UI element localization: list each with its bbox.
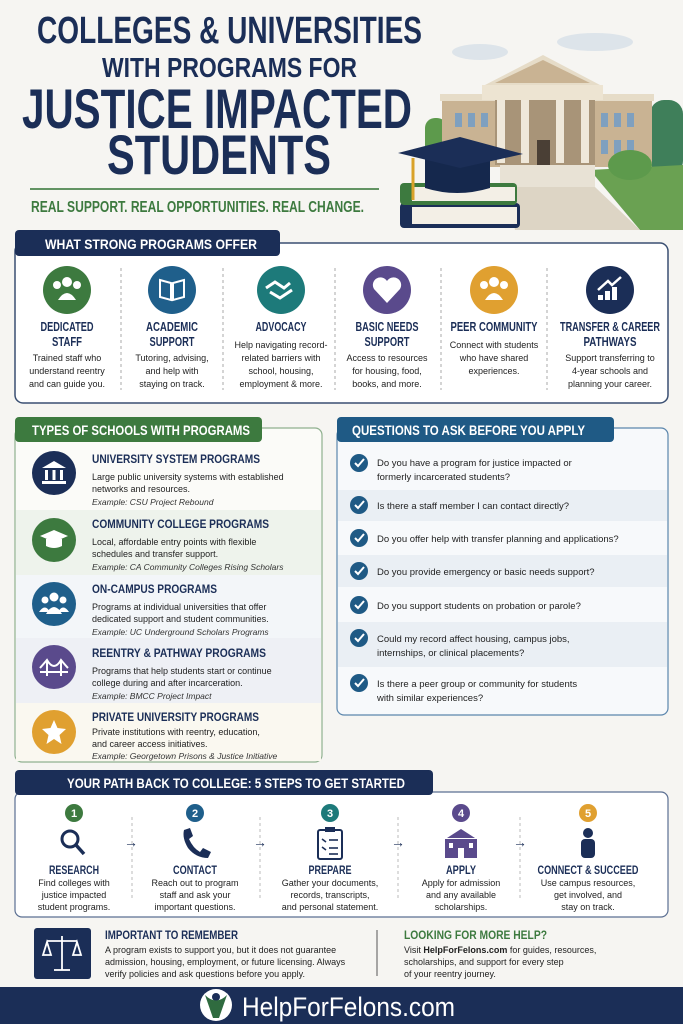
row: on-campus: dedicated support and student communities. [92,614,269,624]
step 1 research: 1 [71,808,77,820]
item: peer community: Connect with students [450,340,539,350]
row: reentry & pathway: Programs that help students start or continue [92,666,272,676]
item: dedicated staff: STAFF [52,334,82,349]
item: transfer & career pathways: planning your career. [568,379,652,389]
item: advocacy [234,266,328,389]
heading: what strong programs offer [15,230,280,256]
item: academic support [135,266,209,389]
item: peer community: who have shared [459,353,528,363]
step 4 apply: Apply for admission [422,878,500,888]
item: basic needs support: Access to resources [346,353,428,363]
note: looking for more help: scholarships, and support for every step [404,957,564,967]
question list: Do you support students on probation or parole? [377,601,581,612]
item: basic needs support [346,266,428,389]
item: transfer & career pathways: Support transferring to [565,353,655,363]
row: reentry & pathway: REENTRY & PATHWAY PROGRAMS [92,646,266,660]
step 4 apply: and any available [426,890,496,900]
note: looking for more help: LOOKING FOR MORE HELP? [404,928,547,942]
step 4 apply [422,804,500,912]
question list: formerly incarcerated students? [377,472,510,483]
row: community college [32,517,284,572]
step 3 prepare: and personal statement. [282,902,378,912]
note: important to remember: IMPORTANT TO REMEMBER [105,928,238,942]
item: basic needs support: for housing, food, [352,366,422,376]
step 5 connect: stay on track. [561,902,615,912]
row: community college: schedules and transfer support. [92,549,218,559]
row: university system: Large public university systems with established [92,472,284,482]
row: private university: and career access initiatives. [92,739,208,749]
footer: HelpForFelons.com [242,992,455,1022]
row: private university [32,710,277,761]
item: transfer & career pathways: 4-year schools and [572,366,648,376]
title: STUDENTS [107,123,331,186]
step 5 connect: Use campus resources, [541,878,635,888]
item: advocacy: Help navigating record- [234,340,328,350]
heading: 5 steps: YOUR PATH BACK TO COLLEGE: 5 STEPS TO GET STARTED [67,775,405,791]
panel: types of schools [15,417,322,762]
arrows: → [253,834,267,850]
row: on-campus [32,582,269,637]
step 5 connect: CONNECT & SUCCEED [538,863,639,877]
title [22,10,422,186]
item: dedicated staff [29,266,105,389]
note: important to remember: verify policies and ask questions before you apply. [105,969,305,979]
step 4 apply: APPLY [446,863,476,877]
item: transfer & career pathways [560,266,660,389]
row: private university: Example: Georgetown Prisons & Justice Initiative [92,751,277,761]
step 3 prepare: Gather your documents, [282,878,378,888]
step 1 research: RESEARCH [49,863,99,877]
question list: internships, or clinical placements? [377,648,524,659]
step 3 prepare: records, transcripts, [290,890,370,900]
row: university system: networks and resources. [92,484,190,494]
note: important to remember: A program exists to support you, but it does not guarantee [105,945,336,955]
step 2 contact: 2 [192,808,198,820]
panel: questions to ask [337,417,668,715]
arrows: → [124,834,138,850]
heading: questions: QUESTIONS TO ASK BEFORE YOU APPLY [352,422,586,438]
panel: 5 steps [15,770,668,917]
item: academic support: and help with [145,366,199,376]
question list: Could my record affect housing, campus jobs, [377,634,570,645]
heading: questions [337,417,614,442]
step 2 contact: important questions. [154,902,236,912]
question list: with similar experiences? [376,693,483,704]
step 1 research [38,804,110,912]
heading: what strong programs offer: WHAT STRONG PROGRAMS OFFER [45,236,257,252]
item: dedicated staff: Trained staff who [33,353,101,363]
item: basic needs support: books, and more. [352,379,422,389]
title: JUSTICE IMPACTED [22,77,412,140]
step 5 connect: 5 [585,808,591,820]
item: academic support: Tutoring, advising, [135,353,209,363]
item: transfer & career pathways: PATHWAYS [584,334,637,349]
row: on-campus: Programs at individual universities that offer [92,602,266,612]
question list: Is there a peer group or community for students [377,679,577,690]
item: dedicated staff: DEDICATED [40,319,94,334]
step 4 apply: 4 [458,808,465,820]
row: private university: PRIVATE UNIVERSITY PROGRAMS [92,710,259,724]
item: advocacy: related barriers with [241,353,321,363]
step 3 prepare: PREPARE [308,863,352,877]
step 2 contact: CONTACT [173,863,217,877]
row: community college: COMMUNITY COLLEGE PROGRAMS [92,517,269,531]
note: important to remember [34,928,346,979]
note: looking for more help: of your reentry journey. [404,969,496,979]
step 1 research: Find colleges with [38,878,110,888]
row: university system: Example: CSU Project Rebound [92,497,214,507]
step 2 contact: staff and ask your [160,890,230,900]
heading: 5 steps [15,770,433,795]
arrows: → [513,834,527,850]
heading: types of schools [15,417,262,442]
item: academic support: SUPPORT [150,334,195,349]
row: community college: Local, affordable entry points with flexible [92,537,256,547]
item: dedicated staff: and can guide you. [29,379,105,389]
question list: Is there a staff member I can contact directly? [377,501,569,512]
step 2 contact: Reach out to program [151,878,239,888]
row: on-campus: ON-CAMPUS PROGRAMS [92,582,217,596]
item: dedicated staff: understand reentry [29,366,105,376]
row: university system [32,451,284,507]
item: advocacy: employment & more. [239,379,323,389]
question list: Do you have a program for justice impacted or [377,458,572,469]
step 3 prepare [282,804,378,912]
step 5 connect: get involved, and [554,890,622,900]
row: community college: Example: CA Community Colleges Rising Scholars [92,562,284,572]
item: peer community [450,266,539,376]
item: advocacy: ADVOCACY [256,319,307,334]
step 5 connect [538,804,639,912]
item: advocacy: school, housing, [248,366,314,376]
step 1 research: student programs. [38,902,110,912]
note: important to remember: admission, housing, employment, or future licensing. Always [105,957,346,967]
question list: Do you offer help with transfer planning and applications? [377,534,619,545]
arrows [124,834,527,850]
illustration: grad cap and books [398,137,523,228]
item: peer community: experiences. [468,366,520,376]
heading: types of schools: TYPES OF SCHOOLS WITH PROGRAMS [32,422,250,438]
row: reentry & pathway: college during and after incarceration. [92,678,243,688]
item: academic support: staying on track. [139,379,205,389]
tagline: REAL SUPPORT. REAL OPPORTUNITIES. REAL CHANGE. [31,199,364,216]
title: COLLEGES & UNIVERSITIES [37,10,422,52]
item: academic support: ACADEMIC [146,319,198,334]
panel: what strong programs offer [15,230,668,403]
row: reentry & pathway [32,645,272,701]
step 2 contact [151,804,239,912]
note: looking for more help: Visit HelpForFelons.com for guides, resources, [404,945,596,955]
row: on-campus: Example: UC Underground Scholars Programs [92,627,269,637]
row: university system: UNIVERSITY SYSTEM PROGRAMS [92,452,260,466]
question list: Do you provide emergency or basic needs support? [377,567,595,578]
row: reentry & pathway: Example: BMCC Project Impact [92,691,212,701]
item: basic needs support: BASIC NEEDS [356,319,419,334]
illustration: campus building [425,33,683,230]
item: basic needs support: SUPPORT [364,334,410,349]
row: private university: Private institutions with reentry, education, [92,727,260,737]
step 4 apply: scholarships. [435,902,487,912]
step 1 research: justice impacted [41,890,106,900]
arrows: → [391,834,405,850]
note: looking for more help [404,928,596,979]
question list [350,454,619,704]
item: peer community: PEER COMMUNITY [450,319,538,334]
step 3 prepare: 3 [327,808,333,820]
footer [0,987,683,1024]
title: WITH PROGRAMS FOR [102,52,357,83]
